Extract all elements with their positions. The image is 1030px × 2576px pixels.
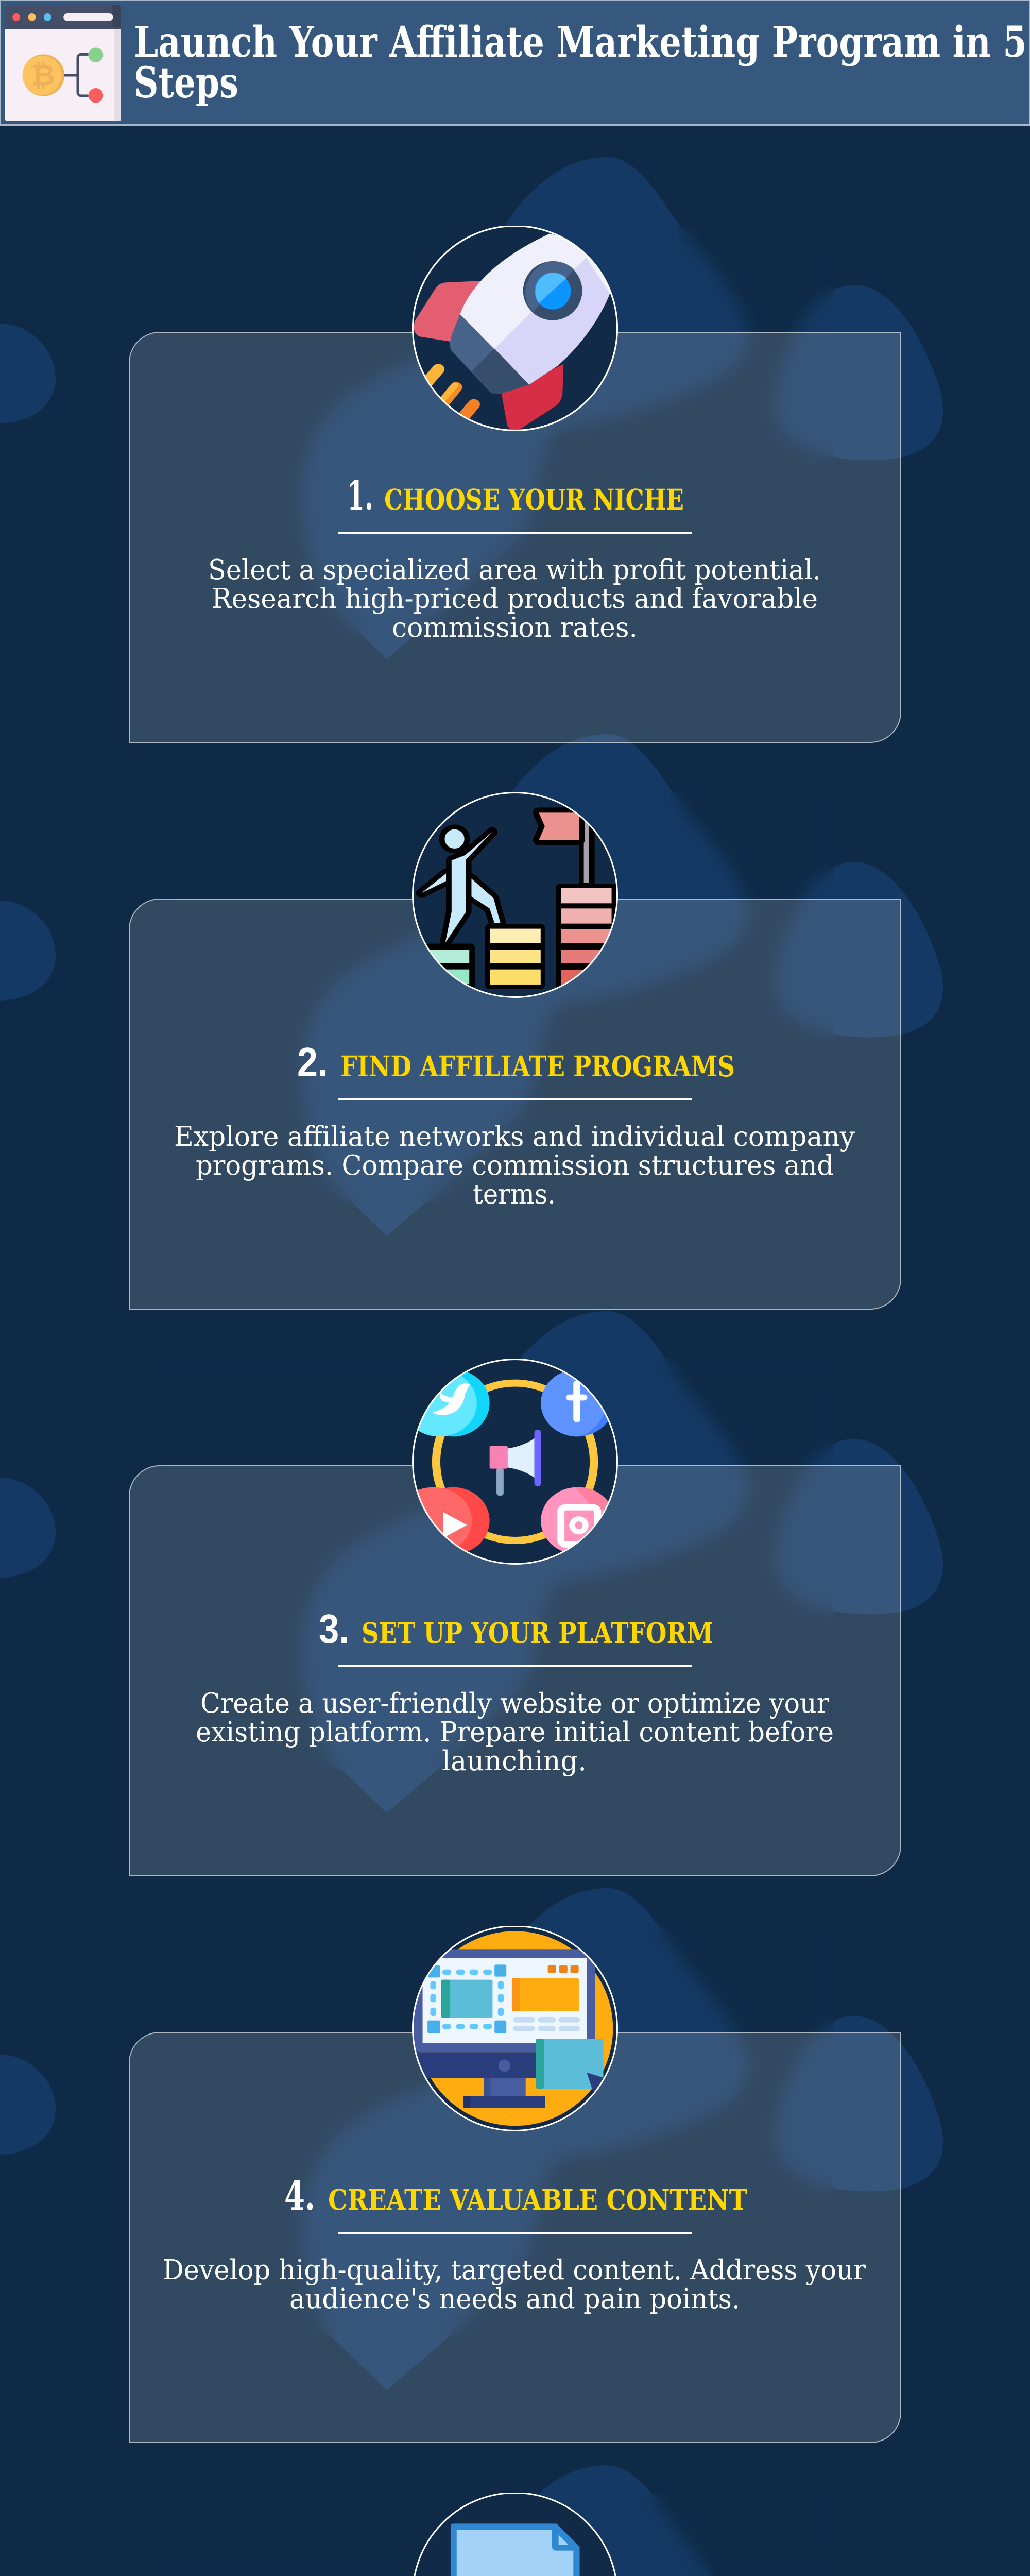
heading: step 1: CHOOSE YOUR NICHE xyxy=(384,483,684,516)
text: step 2 description: terms. xyxy=(473,1179,556,1210)
heading: step 1: 1. xyxy=(347,472,373,519)
heading: step 1 xyxy=(347,472,684,519)
icon: megaphone with social networks xyxy=(395,1359,617,1564)
text: step 4 description: audience's needs and pain points. xyxy=(289,2283,740,2315)
text: step 1 description: commission rates. xyxy=(392,612,638,643)
heading: step 4: 4. xyxy=(284,2173,315,2219)
text: step 4 description xyxy=(163,2255,866,2315)
text: step 4 description: Develop high-quality, targeted content. Address your xyxy=(163,2255,866,2286)
text: step 2 description: programs. Compare commission structures and xyxy=(196,1150,834,1181)
header banner xyxy=(0,0,1030,126)
heading: step 4 xyxy=(284,2173,747,2219)
text: step 1 description xyxy=(208,554,821,643)
text: step 3 description: existing platform. Prepare initial content before xyxy=(196,1717,834,1748)
text: step 2 description xyxy=(174,1121,855,1210)
icon: rocket xyxy=(413,226,637,431)
heading: step 3 xyxy=(319,1606,713,1652)
title: Steps xyxy=(134,58,238,108)
icon: printer xyxy=(412,2493,617,2576)
text: step 3 description: launching. xyxy=(442,1745,587,1777)
title xyxy=(134,18,1027,108)
panel: step 4 create valuable content xyxy=(129,1926,901,2443)
text: step 2 description: Explore affiliate networks and individual company xyxy=(174,1121,855,1153)
icon: browser window with bitcoin tree xyxy=(5,5,121,121)
heading: step 3: SET UP YOUR PLATFORM xyxy=(362,1616,713,1650)
text: step 1 description: Select a specialized area with profit potential. xyxy=(208,554,821,586)
panel: step 2 find affiliate programs xyxy=(129,792,901,1310)
icon: monitor with layout editor xyxy=(408,1926,617,2131)
heading: step 4: CREATE VALUABLE CONTENT xyxy=(328,2183,747,2216)
icon: browser window with bitcoin tree: ₿ xyxy=(31,59,55,93)
panel: step 5 promote and optimize xyxy=(414,2493,713,2576)
panel: step 1 choose your niche xyxy=(129,226,901,743)
text: step 3 description xyxy=(196,1688,834,1777)
heading: step 2: FIND AFFILIATE PROGRAMS xyxy=(340,1049,735,1083)
text: step 1 description: Research high-priced products and favorable xyxy=(212,583,818,615)
icon: figure climbing stacks to flag xyxy=(413,792,617,997)
heading: step 2 xyxy=(297,1039,735,1085)
text: step 3 description: Create a user-friendly website or optimize your xyxy=(200,1688,830,1719)
heading: step 2: 2. xyxy=(297,1039,328,1085)
panel: step 3 set up your platform xyxy=(129,1359,901,1876)
heading: step 3: 3. xyxy=(319,1606,349,1652)
